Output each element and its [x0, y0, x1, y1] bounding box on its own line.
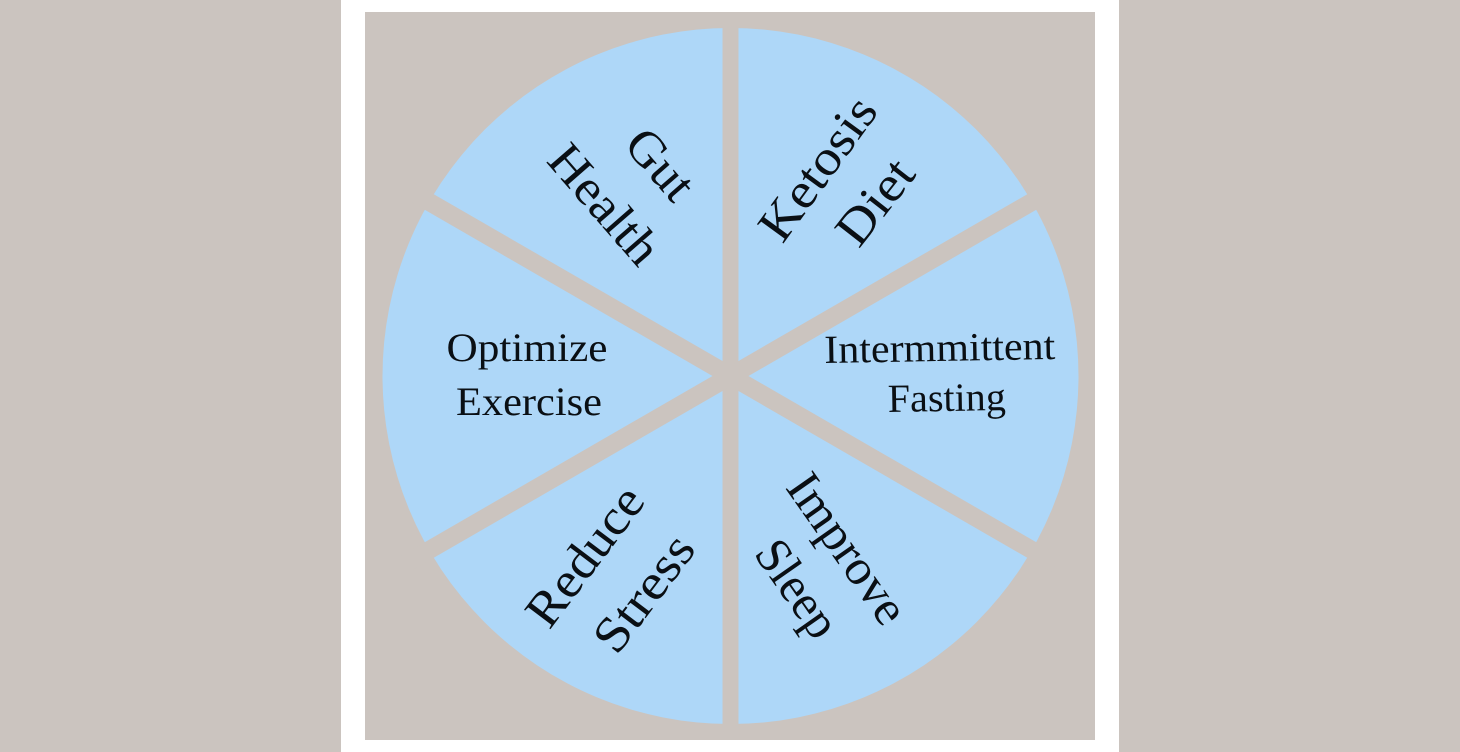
label: Reduce Stress	[513, 474, 706, 663]
label: Ketosis Diet: Diet	[823, 147, 926, 256]
label: Intermmittent Fasting: Intermmittent	[824, 323, 1056, 372]
label: Gut Health: Health	[537, 132, 673, 276]
label: Ketosis Diet: Ketosis	[746, 85, 888, 251]
label: Optimize Exercise: Optimize	[446, 325, 608, 370]
label: Ketosis Diet	[746, 85, 926, 256]
label: Optimize Exercise	[446, 325, 608, 424]
pie wheel	[382, 13, 1078, 739]
label: Improve Sleep: Sleep	[744, 528, 852, 649]
label: Gut Health	[537, 116, 708, 276]
label: Improve Sleep: Improve	[776, 462, 920, 635]
label: Intermmittent Fasting	[824, 323, 1056, 421]
label: Gut Health: Gut	[614, 116, 708, 212]
label: Optimize Exercise: Exercise	[456, 379, 602, 424]
inner panel	[365, 12, 1095, 740]
label: Intermmittent Fasting: Fasting	[887, 374, 1006, 421]
label: Reduce Stress: Stress	[581, 522, 706, 663]
label: Reduce Stress: Reduce	[513, 474, 656, 637]
white frame	[341, 0, 1119, 752]
